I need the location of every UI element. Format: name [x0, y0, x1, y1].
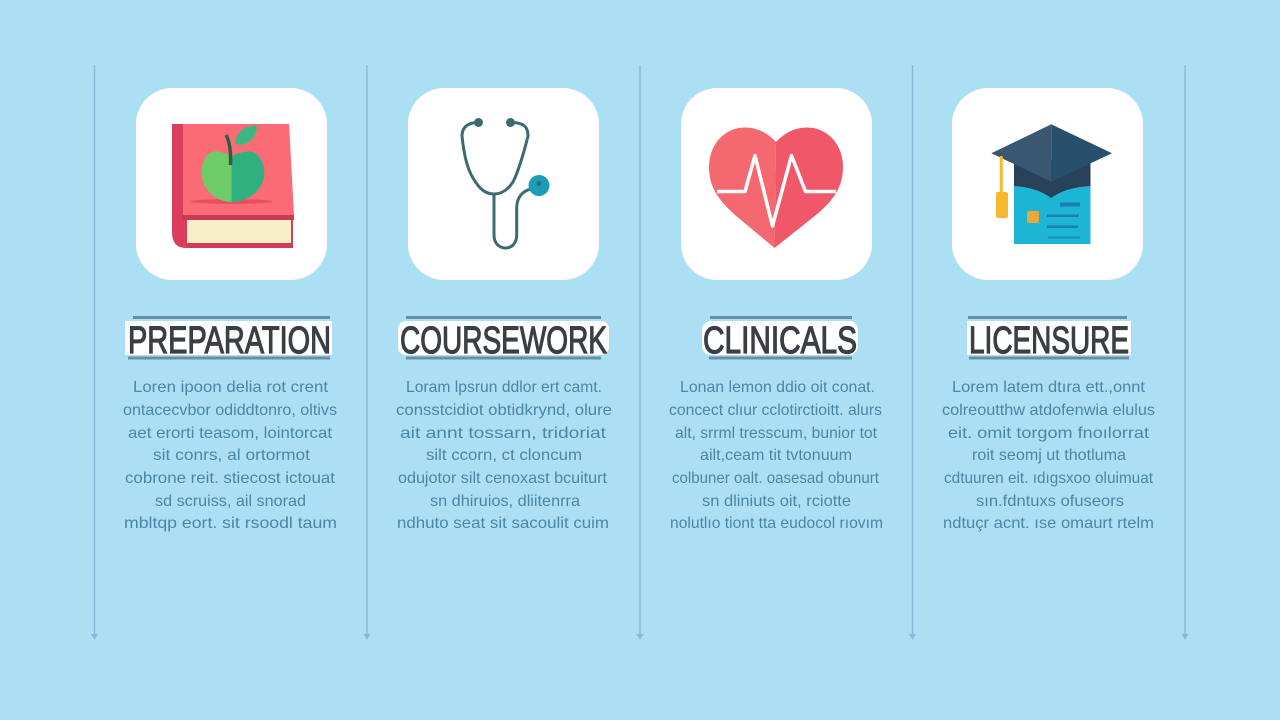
text block: licensure: roit seomj ut thotluma — [972, 447, 1126, 464]
arrow: column divider 2 — [364, 65, 370, 640]
text block: preparation: cobrone reit. stiecost ictouat — [125, 470, 336, 487]
heading: clinicals: CLINICALS — [703, 320, 857, 362]
text block: licensure: Lorem latem dtıra ett.,onnt — [952, 379, 1146, 396]
text block: licensure — [942, 379, 1155, 532]
text block: preparation: mbltqp eort. sit rsoodl taum — [124, 515, 337, 532]
text block: coursework: ndhuto seat sit sacoulit cuim — [397, 515, 609, 532]
arrow: column divider 3 — [636, 65, 644, 640]
text block: preparation: aet erorti teasom, lointorcat — [128, 425, 333, 442]
text block: coursework: ait annt tossarn, tridoriat — [400, 425, 607, 442]
text block: preparation: ontacecvbor odiddtonro, oltivs — [123, 402, 337, 419]
text block: licensure: sın.fdntuxs ofuseors — [976, 493, 1124, 510]
text block: coursework: silt ccorn, ct cloncum — [426, 447, 582, 464]
arrow: column divider 1 — [91, 65, 98, 640]
text block: licensure: ndtuçr acnt. ıse omaurt rtelm — [943, 515, 1154, 532]
heading: licensure: LICENSURE — [969, 320, 1129, 362]
text block: clinicals: colbuner oalt. oasesad obunurt — [672, 470, 880, 487]
icon: book with apple — [136, 88, 327, 280]
panel: licensure — [942, 88, 1155, 532]
arrow: column divider 5 — [1182, 65, 1188, 640]
text block: licensure: eit. omit torgom fnoılorrat — [948, 425, 1150, 442]
panel: preparation — [123, 88, 337, 532]
text block: clinicals: concect clıur cclotirctioitt. alurs — [669, 402, 882, 419]
heading: licensure — [967, 316, 1131, 362]
arrow: column divider 4 — [909, 65, 916, 640]
text block: clinicals: Lonan lemon ddio oit conat. — [680, 379, 875, 396]
panel: coursework — [396, 88, 612, 532]
heading: preparation: PREPARATION — [128, 320, 331, 362]
text block: coursework — [396, 379, 612, 532]
text block: coursework: consstcidiot obtidkrynd, olure — [396, 402, 612, 419]
text block: preparation: sd scruiss, ail snorad — [155, 493, 306, 510]
text block: preparation — [123, 379, 337, 532]
icon: graduation cap with diploma — [952, 88, 1143, 280]
text block: clinicals — [669, 379, 883, 532]
icon: heart with pulse — [681, 88, 872, 280]
icon: stethoscope — [408, 88, 599, 280]
text block: clinicals: ailt,ceam tit tvtonuum — [700, 447, 852, 464]
heading: coursework — [398, 316, 609, 362]
text block: coursework: Loram lpsrun ddlor ert camt. — [406, 379, 602, 396]
text block: preparation: sit conrs, al ortormot — [153, 447, 311, 464]
panel: clinicals — [669, 88, 883, 532]
text block: clinicals: sn dliniuts oit, rciotte — [702, 493, 851, 510]
text block: coursework: odujotor silt cenoxast bcuiturt — [398, 470, 608, 487]
text block: coursework: sn dhiruios, dliitenrra — [430, 493, 580, 510]
text block: licensure: colreoutthw atdofenwia elulus — [942, 402, 1155, 419]
text block: licensure: cdtuuren eit. ıdıgsxoo oluimuat — [944, 470, 1154, 487]
text block: clinicals: nolutlıo tiont tta eudocol rıovım — [670, 515, 883, 532]
text block: preparation: Loren ipoon delia rot crent — [133, 379, 329, 396]
heading: coursework: COURSEWORK — [400, 320, 607, 362]
text block: clinicals: alt, srrml tresscum, bunior tot — [675, 425, 878, 442]
